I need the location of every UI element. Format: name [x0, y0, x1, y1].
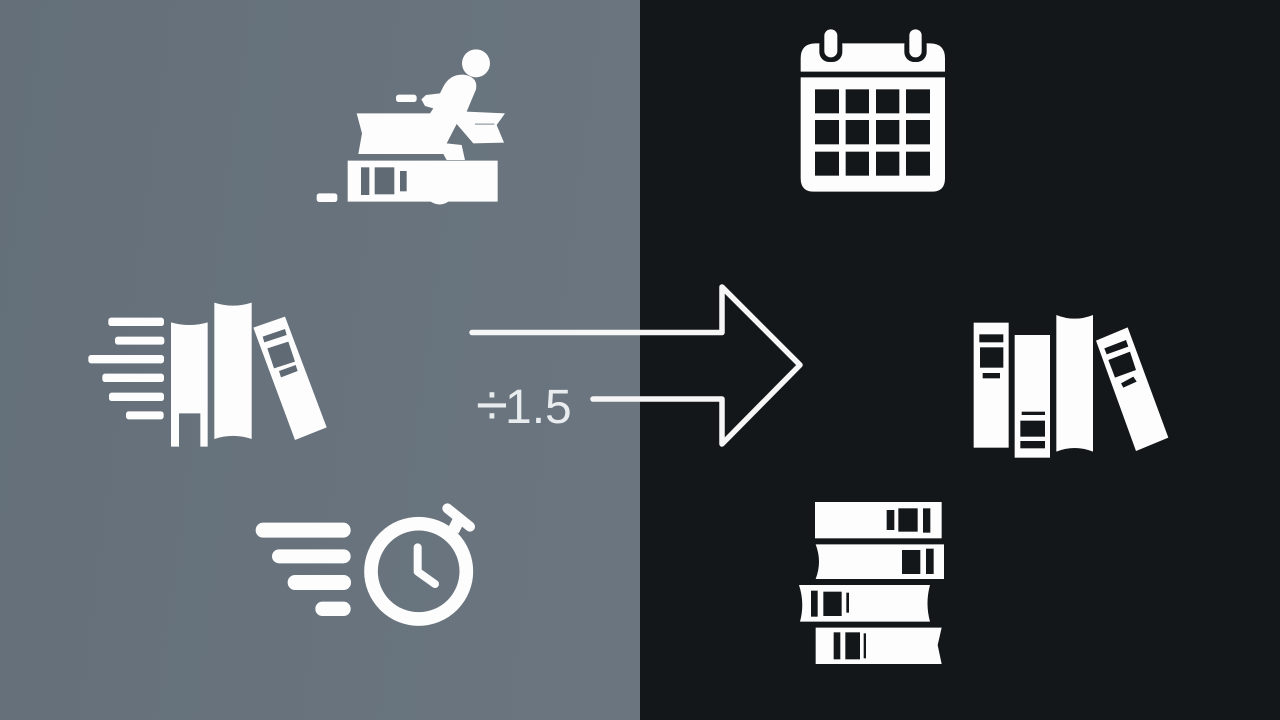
third book: [799, 585, 930, 622]
stopwatch: [371, 508, 470, 619]
speed lines: [88, 318, 164, 419]
top book: [815, 502, 942, 538]
arrow: outlined arrow crossing the panels: [472, 287, 800, 444]
book three: [1056, 315, 1093, 452]
bottom book: [816, 628, 942, 664]
second book: [816, 544, 944, 579]
book with notch: [171, 322, 208, 447]
panel: right slow side background: [640, 0, 1280, 720]
binder rings: [819, 29, 927, 62]
book one: [974, 323, 1009, 448]
leaning book: [253, 317, 327, 440]
icon: figure running over books: [317, 49, 505, 204]
icon: stopwatch with speed lines: [256, 508, 470, 619]
date grid: [815, 89, 930, 176]
icon: upright books: [974, 315, 1168, 458]
text: divide by 1.5 label: 1.5: [505, 381, 572, 434]
text: divide by 1.5 label: ÷: [476, 373, 508, 438]
tall book: [214, 303, 252, 439]
book two: [1015, 335, 1050, 458]
speed lines: [256, 523, 351, 616]
book four: [1096, 327, 1168, 451]
panel: left fast side background: [0, 0, 640, 720]
icon: books with speed lines: [88, 303, 327, 447]
icon: stack of books: [799, 502, 944, 664]
icon: calendar: [801, 29, 945, 192]
